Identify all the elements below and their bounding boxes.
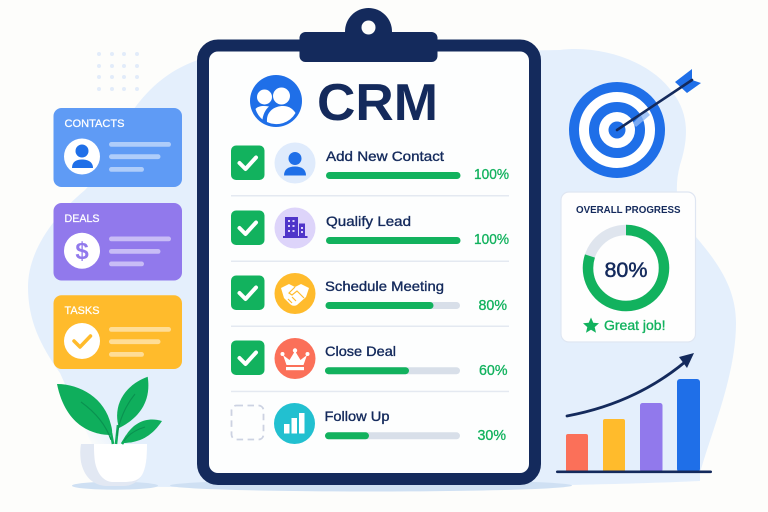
icon: contact person xyxy=(64,138,100,174)
icon: dollar: $ xyxy=(75,238,89,265)
clipboard clip xyxy=(300,8,438,62)
progress bar 60% xyxy=(325,367,460,374)
percent: 60% xyxy=(479,363,508,379)
progress bar 100% xyxy=(326,237,460,244)
percent: 30% xyxy=(478,428,506,444)
overall progress heading: OVERALL PROGRESS xyxy=(576,204,680,216)
progress bar 100% xyxy=(326,172,460,179)
percent: 100% xyxy=(474,232,509,248)
bar chart with growth arrow xyxy=(556,353,712,473)
checkbox empty xyxy=(232,406,264,440)
panel: tasks card xyxy=(54,295,182,369)
label: Add New Contact xyxy=(326,149,444,164)
checkbox checked xyxy=(231,276,264,310)
progress bar 80% xyxy=(326,302,460,309)
contacts label: CONTACTS xyxy=(64,118,124,130)
decorative dot grid xyxy=(97,52,139,91)
row: add new contact xyxy=(231,142,509,184)
row: schedule meeting xyxy=(231,273,507,314)
progress bar 30% xyxy=(325,432,460,439)
icon: CRM people logo xyxy=(250,75,302,127)
bar: blue xyxy=(677,379,700,472)
panel: contacts card xyxy=(54,108,182,187)
percent: 80% xyxy=(478,298,507,314)
row: follow up xyxy=(232,403,506,444)
icon: target with arrow xyxy=(574,69,701,173)
deals label: DEALS xyxy=(64,213,100,225)
tasks label: TASKS xyxy=(64,305,100,317)
checkbox checked xyxy=(231,210,264,245)
donut chart 80% xyxy=(588,230,664,306)
great job text: Great job! xyxy=(604,317,666,333)
checkbox checked xyxy=(231,340,264,375)
icon: star xyxy=(583,318,599,333)
row: close deal xyxy=(231,338,508,379)
row: qualify lead xyxy=(231,208,509,248)
label: Qualify Lead xyxy=(326,214,411,229)
icon: building xyxy=(274,208,316,248)
icon: task check xyxy=(64,323,100,359)
percent: 100% xyxy=(474,167,509,183)
label: Schedule Meeting xyxy=(325,279,444,294)
panel: deals card xyxy=(54,203,182,280)
tasks text lines xyxy=(109,327,171,357)
checkbox checked xyxy=(231,146,264,180)
icon: bar chart xyxy=(274,403,315,444)
donut value: 80% xyxy=(604,258,648,282)
icon: handshake xyxy=(274,273,316,314)
icon: contact xyxy=(274,142,316,184)
title: CRM: CRM xyxy=(317,74,438,132)
icon: crown xyxy=(274,338,316,379)
bar: yellow xyxy=(603,419,625,472)
deals text lines xyxy=(109,236,171,266)
icon: potted plant xyxy=(57,377,162,490)
panel: clipboard xyxy=(203,8,535,479)
growth arrow xyxy=(567,353,694,416)
clipboard shadow xyxy=(170,480,572,492)
contacts text lines xyxy=(109,142,171,172)
bar: red xyxy=(566,434,588,472)
label: Follow Up xyxy=(324,409,390,424)
bar: purple xyxy=(640,403,662,472)
panel: overall progress xyxy=(561,192,696,342)
label: Close Deal xyxy=(325,344,396,359)
